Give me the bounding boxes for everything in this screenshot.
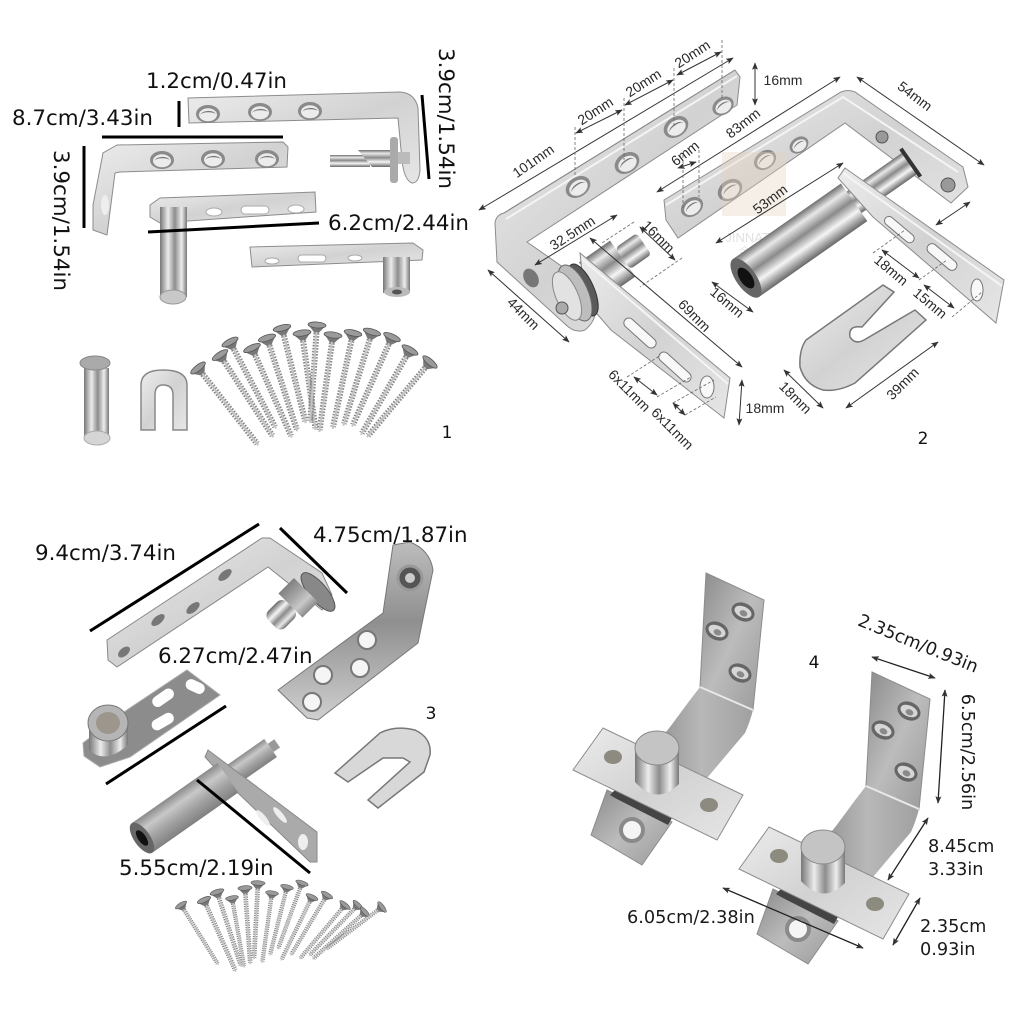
panel 4: pivot hinge pair — [573, 573, 994, 964]
dimension labels: 44mm — [504, 294, 543, 333]
dimension labels: 6x11mm — [605, 366, 654, 415]
dimension labels: 16mm — [639, 217, 678, 256]
number 1: 1 — [442, 423, 452, 443]
dimension labels: 6x11mm — [648, 404, 697, 453]
slotted plate — [580, 253, 730, 418]
label: 6.27cm — [106, 644, 313, 784]
loose pin — [80, 356, 110, 445]
angled bracket — [278, 542, 433, 720]
label: 3.9cm right — [422, 48, 458, 189]
depth dimension: 3.33in — [928, 860, 984, 880]
panel 3: stainless hinge parts — [35, 523, 468, 975]
watermark — [722, 152, 786, 260]
height dimension — [938, 690, 977, 810]
label: 3.9cm left: 3.9cm/1.54in — [48, 150, 73, 291]
washers and screw — [546, 260, 604, 326]
dimension labels: 16mm — [707, 284, 747, 321]
label: 3.9cm right: 3.9cm/1.54in — [433, 48, 458, 189]
right hinge — [739, 672, 930, 964]
dimension labels: 32.5mm — [547, 212, 598, 253]
dimension labels: 6mm — [668, 137, 702, 169]
label: 9.4cm — [35, 524, 259, 631]
label: 6.2cm: 6.2cm/2.44in — [328, 211, 469, 236]
socket plate — [250, 243, 423, 297]
number 2: 2 — [918, 429, 928, 449]
dimension labels: 18mm — [746, 400, 784, 416]
screws — [174, 879, 388, 975]
height dimension: 6.5cm/2.56in — [957, 694, 977, 810]
panel 2: polished hinge with millimetre dimensions — [479, 37, 1004, 453]
barrel with plate — [125, 734, 317, 862]
long bracket — [495, 70, 740, 331]
U clip — [141, 370, 187, 430]
dimension labels: 39mm — [883, 364, 922, 403]
dimension labels: 69mm — [675, 296, 714, 335]
pin plate — [150, 192, 316, 304]
label: 5.55cm: 5.55cm/2.19in — [119, 856, 274, 881]
dimension labels: 53mm — [750, 181, 790, 217]
label: 6.2cm — [148, 211, 469, 236]
dimension labels: 54mm — [895, 78, 935, 114]
dimension labels: 20mm — [575, 94, 616, 128]
number 3: 3 — [426, 704, 436, 724]
dimension labels: 16mm — [764, 72, 802, 88]
length dimension — [627, 888, 863, 948]
length dimension: 6.05cm/2.38in — [627, 908, 755, 928]
dimension labels: 18mm — [776, 378, 815, 417]
dimension labels: 101mm — [509, 141, 557, 181]
dimension labels: 18mm — [871, 252, 911, 289]
U clip — [335, 728, 430, 808]
dimension labels: 15mm — [910, 285, 950, 322]
width top dimension: 2.35cm/0.93in — [855, 611, 981, 678]
label: 4.75cm: 4.75cm/1.87in — [313, 523, 468, 548]
label: 4.75cm — [280, 523, 468, 593]
label: 6.27cm: 6.27cm/2.47in — [158, 644, 313, 669]
dimension labels — [504, 37, 950, 453]
screws — [189, 321, 439, 451]
watermark: 金 锌 — [739, 243, 765, 260]
label: 8.7cm: 8.7cm/3.43in — [12, 106, 153, 131]
depth dimension — [888, 818, 994, 880]
U clip large — [800, 285, 926, 390]
depth dimension: 8.45cm — [928, 837, 994, 857]
number 4: 4 — [809, 653, 819, 673]
second bracket — [93, 142, 288, 235]
watermark: JINNATE — [725, 230, 779, 245]
tab dimension — [893, 898, 986, 960]
dimension lines — [479, 40, 984, 425]
dimension labels: 20mm — [672, 37, 713, 71]
barrel with plate — [725, 148, 1004, 323]
left hinge — [573, 573, 764, 865]
tab dimension: 0.93in — [920, 940, 976, 960]
label: 1.2cm: 1.2cm/0.47in — [146, 69, 287, 94]
pivot pin — [579, 226, 657, 298]
label: 9.4cm: 9.4cm/3.74in — [35, 541, 176, 566]
panel 1: zinc hinge parts — [12, 48, 469, 451]
tab dimension: 2.35cm — [920, 917, 986, 937]
label: 5.55cm — [119, 780, 310, 881]
socket plate — [83, 670, 220, 767]
short bracket — [664, 90, 968, 238]
dimension labels: 83mm — [723, 105, 763, 141]
long bracket — [107, 538, 340, 667]
dimension labels: 20mm — [623, 66, 664, 100]
top bracket — [188, 92, 420, 183]
